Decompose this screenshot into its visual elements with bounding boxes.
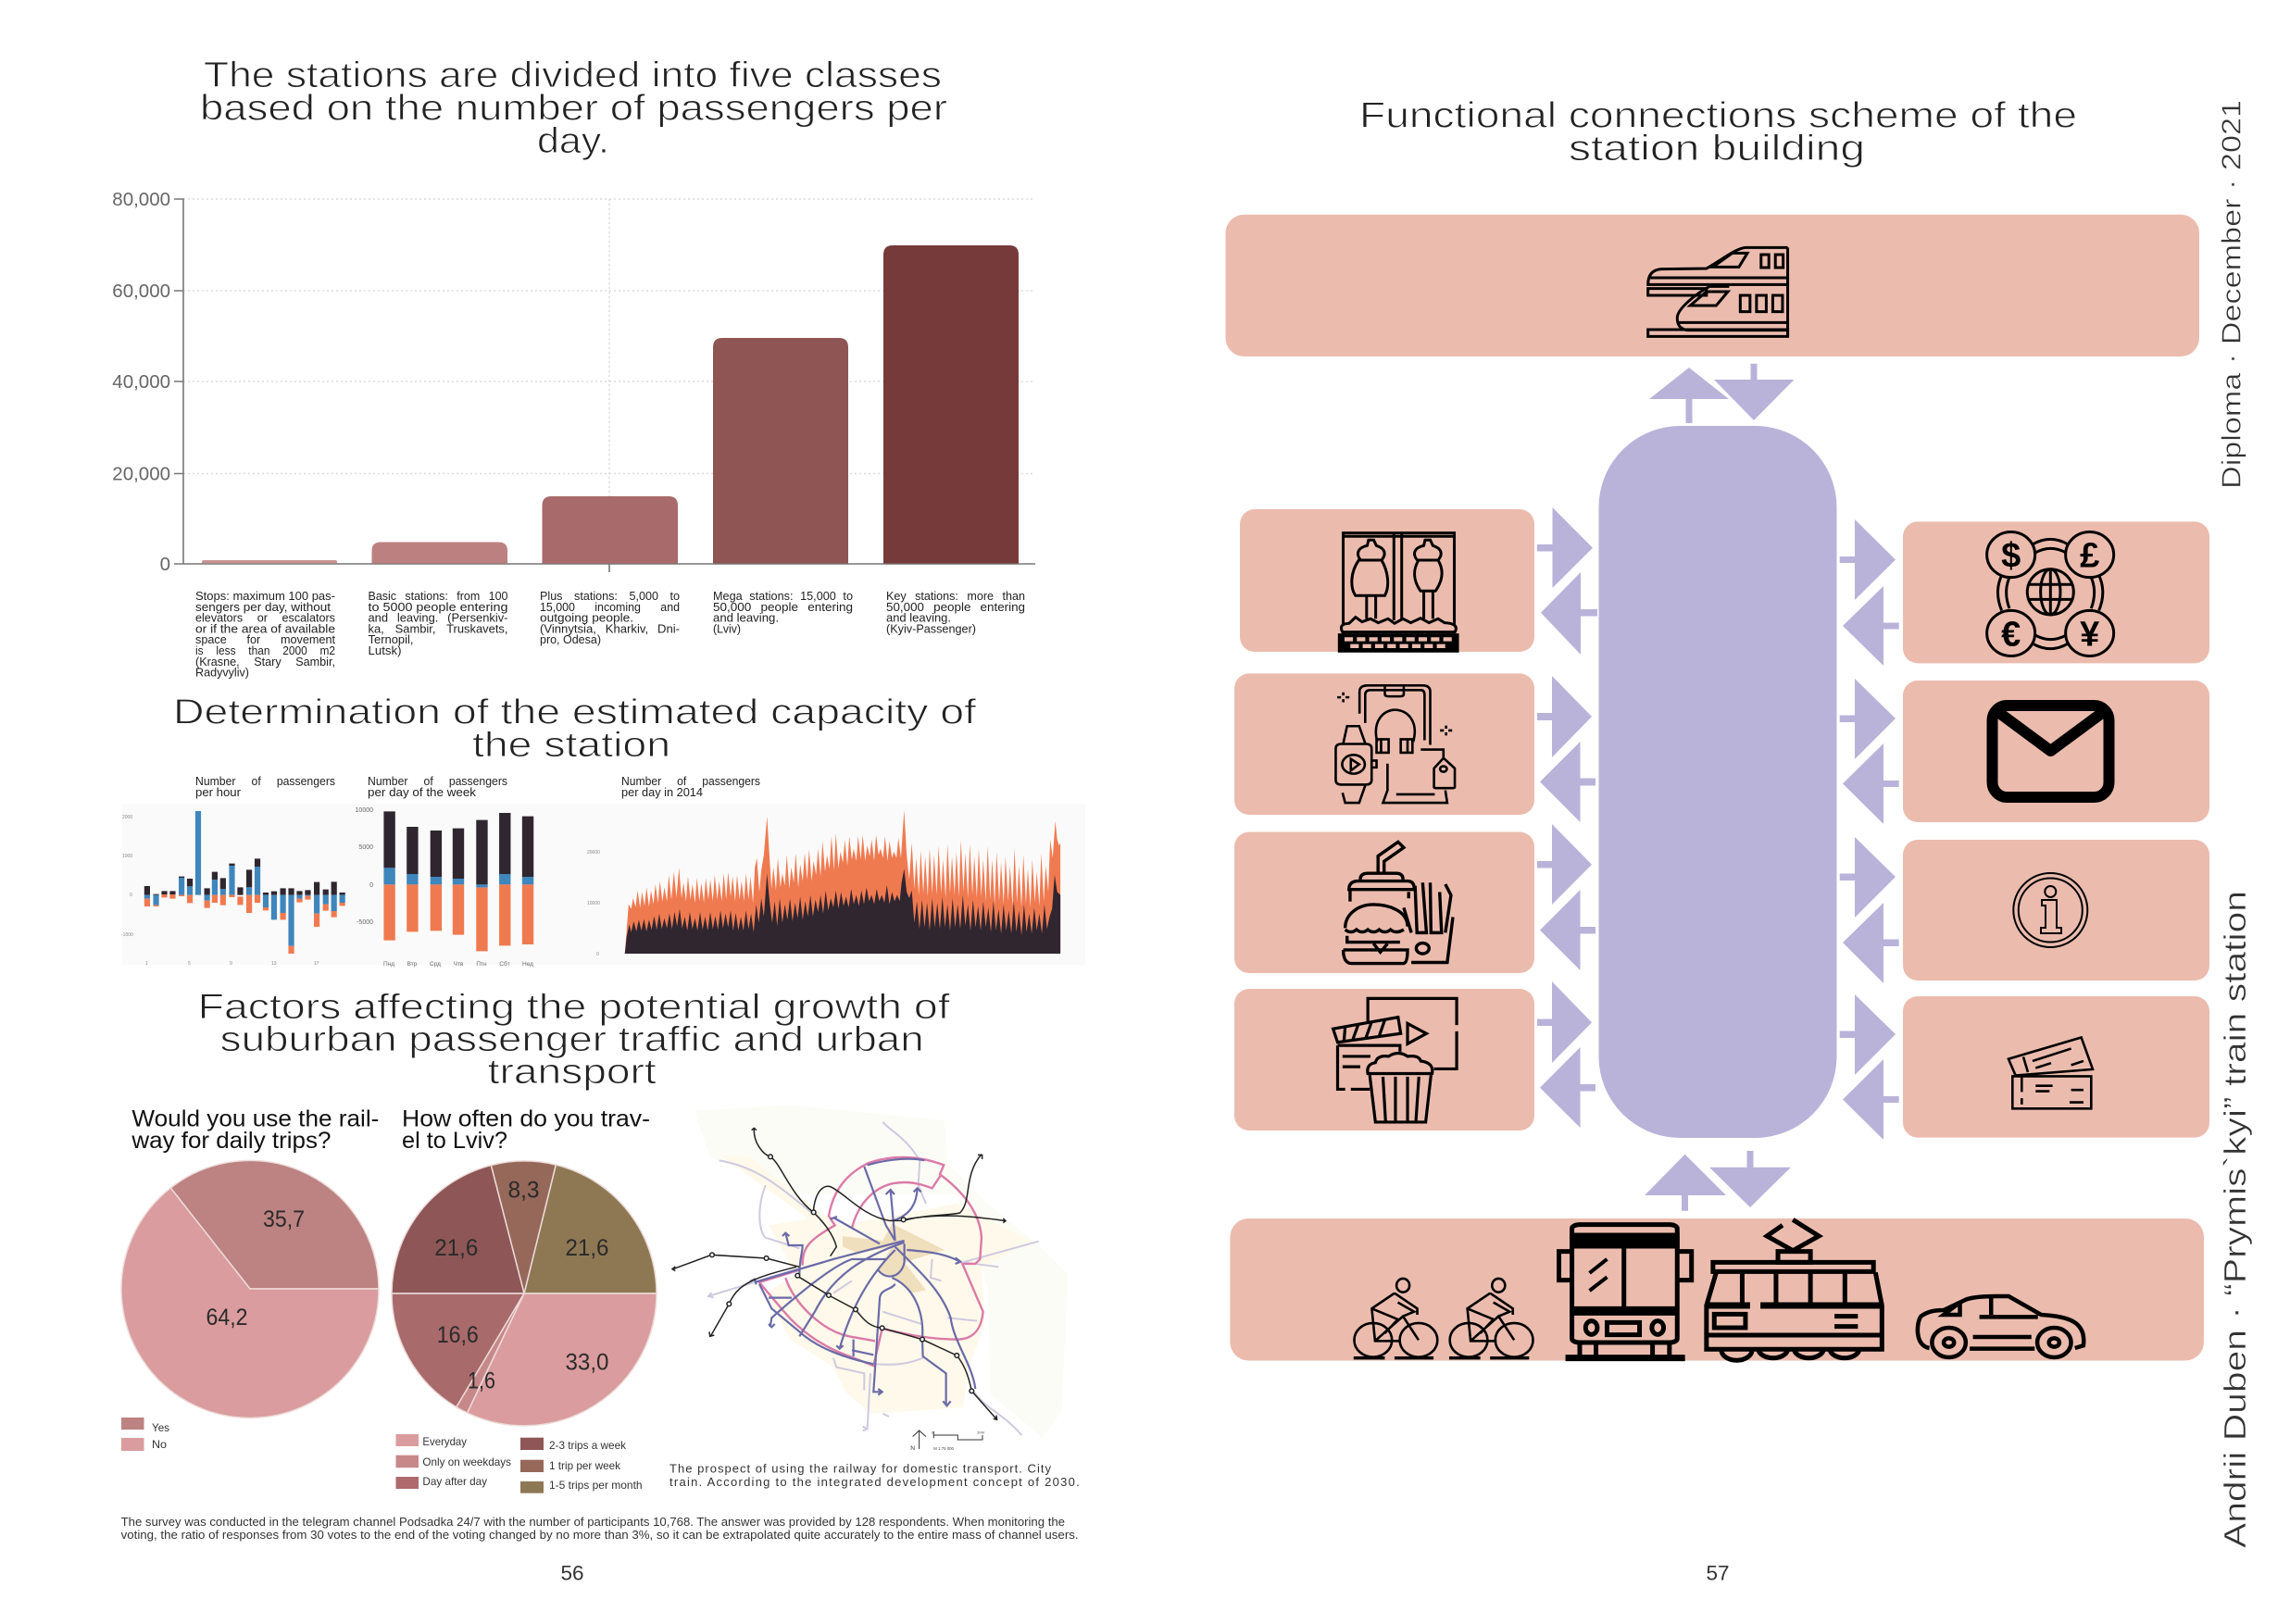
axis labels: 1000 bbox=[122, 854, 132, 859]
text block: station class descriptions: and leaving. (Persenkiv- bbox=[369, 612, 507, 625]
weekday labels: Птн bbox=[476, 961, 487, 968]
text block: station class descriptions: Key stations: more than bbox=[886, 590, 1025, 603]
y-axis labels: 80,000 bbox=[112, 189, 170, 210]
axis labels: 0 bbox=[130, 893, 132, 898]
axis labels: -5000 bbox=[357, 919, 373, 926]
text block: station class descriptions: Radyvyliv) bbox=[195, 667, 249, 680]
pie chart: travel frequency bbox=[392, 1161, 657, 1426]
text block: station class descriptions: outgoing people. bbox=[540, 612, 633, 625]
heading: travel frequency question: el to Lviv? bbox=[402, 1128, 507, 1154]
panel: trains bbox=[1226, 215, 2199, 356]
text block: station class descriptions: (Vinnytsia, Kharkiv, Dni- bbox=[540, 622, 680, 635]
title: station classes: The stations are divided into five classes bbox=[204, 56, 942, 95]
title: factors affecting traffic: Factors affecting the potential growth of bbox=[198, 988, 950, 1027]
map: city train prospect bbox=[672, 1105, 1068, 1452]
text block: station class descriptions: Stops: maximum 100 pas- bbox=[195, 590, 335, 603]
legend: travel frequency: Only on weekdays bbox=[422, 1455, 511, 1468]
page number 57: 57 bbox=[1706, 1562, 1730, 1585]
icon: car bbox=[1918, 1296, 2084, 1357]
text block: station class descriptions bbox=[195, 590, 1025, 680]
arrows: currency and hall bbox=[1840, 519, 1899, 666]
legend: daily trips bbox=[121, 1418, 169, 1451]
panel: food bbox=[1234, 831, 1534, 973]
map: city train prospect: 2KM bbox=[977, 1431, 984, 1435]
panel: currency exchange bbox=[1903, 521, 2209, 663]
text block: station class descriptions: to 5000 people entering bbox=[369, 601, 508, 614]
text block: station class descriptions: Lutsk) bbox=[369, 644, 402, 657]
panel: information bbox=[1903, 840, 2209, 981]
central hall block bbox=[1598, 426, 1837, 1138]
bar chart: passengers per station class bbox=[112, 189, 1035, 575]
weekday labels: Чтв bbox=[454, 961, 464, 968]
arrows: shops and hall bbox=[1537, 507, 1597, 655]
chart captions: per day of the week bbox=[368, 786, 477, 799]
y-axis labels: 40,000 bbox=[112, 371, 170, 393]
weekday labels: Пнд bbox=[383, 961, 394, 968]
title: factors affecting traffic: suburban passenger traffic and urban bbox=[220, 1020, 924, 1059]
text block: station class descriptions: pro, Odesa) bbox=[540, 633, 601, 646]
panel: shops bbox=[1240, 509, 1534, 652]
pie values: 33,0 bbox=[565, 1350, 609, 1376]
caption: map: train. According to the integrated development concept of 2030. bbox=[669, 1475, 1080, 1489]
weekday labels: Срд bbox=[430, 961, 441, 968]
panel: urban transport bbox=[1230, 1218, 2204, 1361]
icon: fast food bbox=[1344, 842, 1453, 964]
arrow: hall to trains bbox=[1649, 368, 1729, 423]
text block: station class descriptions: (Krasne, Stary Sambir, bbox=[195, 656, 335, 668]
pie values: 1,6 bbox=[468, 1368, 495, 1394]
legend: travel frequency bbox=[396, 1434, 643, 1493]
legend: travel frequency: 2-3 trips a week bbox=[549, 1439, 627, 1452]
pie values bbox=[206, 1206, 305, 1330]
icon: trains bbox=[1648, 247, 1788, 336]
icon: cinema bbox=[1333, 998, 1457, 1122]
text block: station class descriptions: Plus stations: 5,000 to bbox=[540, 590, 680, 603]
currency symbols: £ bbox=[2080, 537, 2099, 576]
caption: map bbox=[669, 1462, 1080, 1489]
pie values: 64,2 bbox=[206, 1305, 248, 1330]
y-axis labels: 60,000 bbox=[112, 281, 170, 302]
chart captions: Number of passengers bbox=[621, 775, 760, 788]
axis labels: 10000 bbox=[587, 901, 600, 906]
title: station classes: based on the number of passengers per bbox=[200, 89, 947, 128]
icon: shop window bbox=[1339, 533, 1458, 651]
bar chart: passengers per hour bbox=[121, 811, 345, 967]
axis labels: 10000 bbox=[356, 807, 373, 814]
text block: station class descriptions: and leaving. bbox=[713, 612, 779, 625]
text block: station class descriptions: space for movement bbox=[195, 633, 336, 646]
arrow: trains to hall bbox=[1714, 364, 1795, 420]
heading: travel frequency question: How often do you trav- bbox=[402, 1106, 650, 1132]
sidebar: author and project: Andrii Duben · “Prymis`kyi” train station bbox=[2218, 891, 2252, 1548]
weekday labels: Сбт bbox=[499, 960, 510, 968]
heading: daily trips question: way for daily trips? bbox=[131, 1128, 331, 1154]
text block: station class descriptions: sengers per day, without bbox=[195, 601, 332, 614]
chart captions bbox=[195, 775, 760, 799]
y-axis labels bbox=[112, 189, 170, 575]
text block: survey note: The survey was conducted in the telegram channel Podsadka 24/7 with the number of participants 10,768. The answer was provided by 128 respondents. When monitoring the bbox=[121, 1516, 1065, 1529]
page number 56: 56 bbox=[560, 1562, 584, 1585]
legend: daily trips: Yes bbox=[152, 1421, 169, 1434]
bars bbox=[202, 245, 1019, 563]
icon: bicycle 1 bbox=[1354, 1279, 1437, 1358]
axis labels: 1 bbox=[145, 961, 148, 967]
map: city train prospect: N bbox=[910, 1445, 915, 1452]
pie values bbox=[434, 1178, 609, 1394]
text block: station class descriptions: is less than 2000 m2 bbox=[195, 644, 335, 657]
chart captions: Number of passengers bbox=[368, 775, 507, 788]
arrows: gadgets and hall bbox=[1537, 676, 1595, 822]
text block: station class descriptions: elevators or escalators bbox=[195, 612, 335, 625]
text block: station class descriptions: or if the area of available bbox=[195, 622, 335, 635]
pie values: 21,6 bbox=[434, 1235, 478, 1261]
axis labels: -1000 bbox=[121, 932, 133, 938]
legend: travel frequency: 1-5 trips per month bbox=[549, 1479, 643, 1492]
axis labels: 0 bbox=[596, 952, 599, 957]
map: city train prospect: 0 bbox=[932, 1431, 933, 1435]
panel: post bbox=[1903, 681, 2209, 822]
axis labels: 9 bbox=[230, 961, 232, 967]
icon: envelope bbox=[1993, 706, 2109, 797]
axis labels: 5000 bbox=[358, 844, 373, 851]
text block: station class descriptions: and leaving. bbox=[886, 612, 951, 625]
title: estimated capacity: Determination of the estimated capacity of bbox=[173, 693, 977, 732]
pie chart: daily trips bbox=[121, 1160, 379, 1418]
axis labels: 20000 bbox=[587, 850, 600, 856]
title: station classes: day. bbox=[537, 121, 609, 161]
y-axis labels: 0 bbox=[160, 554, 170, 575]
title: functional connections: station building bbox=[1569, 129, 1865, 169]
legend: daily trips: No bbox=[152, 1438, 167, 1451]
weekday labels: Втр bbox=[407, 961, 418, 968]
panel: cinema bbox=[1234, 989, 1534, 1131]
weekday labels: Нед bbox=[522, 961, 533, 968]
text block: station class descriptions: ka, Sambir, Truskavets, bbox=[369, 622, 507, 635]
pie values: 21,6 bbox=[565, 1235, 609, 1261]
text block: station class descriptions: Ternopil, bbox=[369, 633, 413, 646]
area chart: passengers per day in 2014 bbox=[587, 810, 1060, 957]
title: functional connections: Functional connections scheme of the bbox=[1359, 96, 2077, 135]
caption: map: The prospect of using the railway for domestic transport. City bbox=[669, 1462, 1052, 1476]
arrows: tickets and hall bbox=[1840, 994, 1899, 1140]
title: factors affecting traffic: transport bbox=[488, 1053, 657, 1092]
text block: station class descriptions: 50,000 people entering bbox=[886, 601, 1025, 614]
bar chart: passengers per day of week bbox=[356, 807, 533, 968]
axis labels: 17 bbox=[314, 961, 319, 967]
text block: survey note: voting, the ratio of responses from 30 votes to the end of the voting changed by no more than 3%, so it can be extrapolated quite accurately to the entire mass of channel users. bbox=[121, 1529, 1079, 1542]
text block: station class descriptions: 15,000 incoming and bbox=[540, 601, 680, 614]
pie values: 16,6 bbox=[437, 1322, 479, 1348]
icon: bicycle 2 bbox=[1449, 1279, 1533, 1358]
arrows: information and hall bbox=[1840, 837, 1899, 983]
title: functional connections bbox=[1359, 96, 2077, 169]
icon: bus bbox=[1559, 1225, 1692, 1358]
chart background strip bbox=[122, 804, 1085, 965]
map: city train prospect: M 1:75 000 bbox=[933, 1446, 955, 1451]
legend: travel frequency: 1 trip per week bbox=[549, 1459, 621, 1472]
chart captions: per hour bbox=[195, 786, 241, 799]
chart captions: per day in 2014 bbox=[621, 786, 703, 799]
arrow: transport to hall bbox=[1709, 1151, 1791, 1207]
arrows: food and hall bbox=[1537, 824, 1595, 970]
pie values: 8,3 bbox=[507, 1178, 539, 1204]
panel: gadgets bbox=[1234, 673, 1534, 815]
axis labels: 5 bbox=[188, 961, 191, 967]
axis labels bbox=[587, 850, 600, 957]
text block: station class descriptions: (Kyiv-Passenger) bbox=[886, 622, 976, 635]
arrows: post and hall bbox=[1840, 679, 1899, 824]
text block: station class descriptions: Basic stations: from 100 bbox=[369, 590, 508, 603]
text block: station class descriptions: 50,000 people entering bbox=[713, 601, 853, 614]
arrow: hall to transport bbox=[1645, 1155, 1726, 1211]
currency symbols: ¥ bbox=[2080, 615, 2099, 654]
legend: travel frequency: Day after day bbox=[422, 1475, 487, 1488]
text block: station class descriptions: Mega stations: 15,000 to bbox=[713, 590, 853, 603]
pie values: 35,7 bbox=[263, 1206, 305, 1232]
currency symbols bbox=[2001, 537, 2099, 654]
legend: travel frequency: Everyday bbox=[422, 1435, 467, 1448]
icon: currency exchange bbox=[1987, 532, 2114, 656]
heading: daily trips question: Would you use the rail- bbox=[131, 1106, 379, 1132]
currency symbols: $ bbox=[2001, 537, 2021, 576]
chart captions: Number of passengers bbox=[195, 775, 335, 788]
weekday labels bbox=[383, 960, 533, 968]
text block: survey note bbox=[121, 1516, 1079, 1542]
icon: tickets bbox=[2008, 1037, 2093, 1108]
axis labels: 0 bbox=[369, 882, 373, 889]
axis labels: 13 bbox=[271, 961, 277, 967]
text block: station class descriptions: (Lviv) bbox=[713, 622, 741, 635]
title: station classes bbox=[200, 56, 947, 161]
currency symbols: € bbox=[2001, 615, 2021, 654]
panel: tickets bbox=[1903, 996, 2209, 1138]
title: estimated capacity: the station bbox=[472, 726, 670, 765]
title: estimated capacity bbox=[173, 693, 977, 765]
icon: information bbox=[2013, 873, 2087, 947]
icon: tram bbox=[1707, 1219, 1882, 1360]
arrows: cinema and hall bbox=[1537, 981, 1595, 1128]
y-axis labels: 20,000 bbox=[112, 463, 170, 485]
icon: gadgets bbox=[1335, 685, 1455, 803]
heading: daily trips question bbox=[131, 1106, 379, 1154]
heading: travel frequency question bbox=[402, 1106, 650, 1154]
axis labels bbox=[356, 807, 373, 926]
axis labels bbox=[121, 815, 319, 967]
title: factors affecting traffic bbox=[198, 988, 950, 1092]
sidebar: diploma date: Diploma · December · 2021 bbox=[2217, 100, 2246, 489]
axis labels: 2000 bbox=[122, 815, 132, 820]
